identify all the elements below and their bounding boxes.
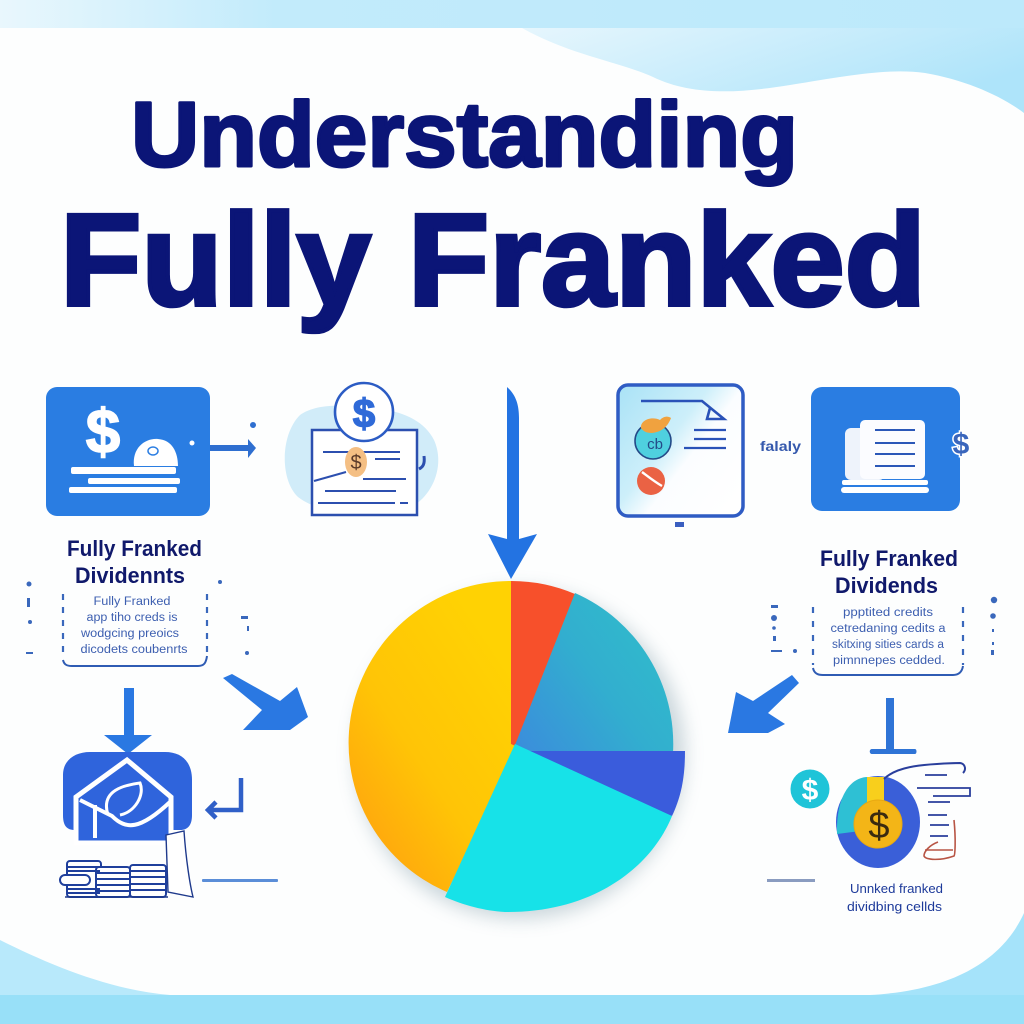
- icon: blue dollar card: $: [86, 398, 120, 467]
- pie chart: [349, 581, 685, 919]
- text block: left dashed description: app tiho creds is: [86, 612, 178, 624]
- text block: bottom-right caption: [847, 882, 943, 914]
- text block: right dashed description: pimnnepes cedded.: [833, 655, 945, 667]
- text block: left dashed description: dicodets coubenrts: [80, 644, 188, 656]
- text block: left heading: [67, 536, 202, 588]
- text block: left dashed description: wodgcing preoics: [80, 628, 179, 640]
- text block: bottom-right caption: Unnked franked: [850, 882, 943, 896]
- text block: left dashed description: Fully Franked: [94, 596, 170, 608]
- arrow: left diagonal to pie: [223, 674, 308, 730]
- icon: teal dollar coin: $: [802, 774, 819, 807]
- text block: right dashed description: cetredaning cedits a: [830, 623, 946, 635]
- line: left caption rule: [202, 879, 278, 882]
- icon: blue document card: $: [953, 428, 970, 461]
- text block: left dashed description: [26, 580, 249, 666]
- text block: bottom-right caption: dividbing cellds: [847, 900, 942, 914]
- icon: envelope with coin stacks: [60, 752, 193, 897]
- icon: teal dollar coin: [790, 770, 830, 808]
- title: [60, 84, 926, 333]
- text block: right dashed description: skitxing sities cards a: [832, 639, 945, 651]
- arrow: dollar card to document: [210, 422, 256, 458]
- icon: screen with portraits: cb: [647, 436, 663, 453]
- arrow: small return arrow: [208, 778, 241, 818]
- icon: donut with gold coin and hand: [836, 763, 970, 868]
- title: Understanding: [131, 84, 798, 186]
- icon: screen with portraits: [618, 385, 743, 527]
- icon: blue dollar card: [46, 387, 210, 516]
- icon: donut with gold coin and hand: $: [868, 805, 890, 847]
- line: right caption rule: [767, 879, 815, 882]
- connector: right T bar: [870, 698, 916, 754]
- arrow: centre down to pie: [488, 387, 537, 579]
- text block: right dashed description: ppptited credits: [843, 607, 933, 619]
- icon: blue document card: [811, 387, 970, 511]
- title: Fully Franked: [60, 186, 926, 333]
- icon: statement with dollar coin: $: [350, 452, 362, 474]
- icon: statement with dollar coin: $: [353, 392, 375, 436]
- text block: left heading: Fully Franked: [67, 536, 202, 561]
- text block: right heading: [820, 546, 958, 598]
- arrow: left down to envelope: [104, 688, 152, 754]
- text block: right heading: Fully Franked: [820, 546, 958, 571]
- text block: right heading: Dividends: [835, 573, 938, 598]
- arrow: right diagonal to pie: [728, 675, 799, 733]
- text block: right dashed description: [771, 597, 997, 675]
- icon: statement with dollar coin: [285, 383, 438, 515]
- label: small connector text: falaly: [760, 438, 801, 454]
- text block: left heading: Dividennts: [75, 563, 185, 588]
